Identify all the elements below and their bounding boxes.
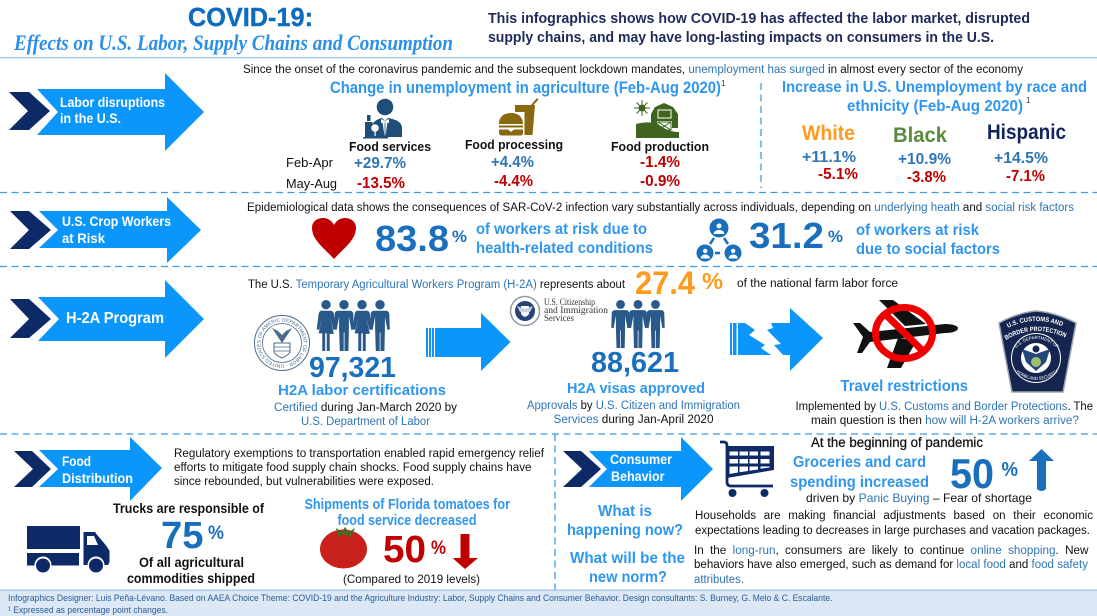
stat: trucks share: 75 xyxy=(161,515,204,557)
heading: race and ethnicity: 1 xyxy=(1026,96,1031,105)
stat: health-related: health-related conditions xyxy=(476,240,653,257)
header description: supply chains, and may have long-lasting impacts on consumers in the U.S. xyxy=(488,30,994,46)
consumer description xyxy=(694,510,1093,586)
stat: tomato decline: % xyxy=(431,538,446,559)
unemployment values: -0.9% xyxy=(640,173,680,190)
period labels: Feb-Apr xyxy=(286,155,334,170)
stat: spending increase xyxy=(950,450,1018,497)
period labels: May-Aug xyxy=(286,176,337,191)
consumer description: Households are making financial adjustments based on their economic xyxy=(695,510,1093,522)
race values: +11.1% xyxy=(802,149,856,166)
section arrow: consumer behavior: Behavior xyxy=(611,468,665,484)
footer: Infographics Designer: Luis Peña-Lévano. Based on AAEA Choice Theme: COVID-19 and the Agriculture Industry: Labor, Supply Chains and Consumer Behavior. Design consultants: S. Burney, G. Melo & C. Escalante. xyxy=(8,593,832,604)
section arrow: food distribution: Distribution xyxy=(62,470,133,486)
stat: farm labor force share: % xyxy=(702,268,723,294)
stat: health-related xyxy=(375,218,653,259)
unemployment values: +4.4% xyxy=(491,154,534,171)
section arrow: H-2A xyxy=(10,280,204,358)
race values: -7.1% xyxy=(1006,168,1045,185)
period labels xyxy=(286,155,337,191)
USCIS wordmark: and Immigration xyxy=(544,305,609,315)
title: Effects on U.S. Labor, Supply Chains and Consumption xyxy=(13,30,453,55)
travel restrictions text: main question is then how will H-2A workers arrive? xyxy=(811,415,1079,427)
icon: shopping cart xyxy=(720,442,774,497)
stat: H2A visas xyxy=(527,347,740,426)
pandemic spending text: driven by Panic Buying – Fear of shortage xyxy=(806,491,1032,505)
race values: -5.1% xyxy=(818,166,858,183)
stat: spending increase: 50 xyxy=(950,450,994,497)
stat: health-related: 83.8 xyxy=(375,218,449,259)
pandemic spending text xyxy=(790,435,1032,505)
stat: social factors: 31.2 xyxy=(749,215,824,256)
icon: heart xyxy=(312,218,356,259)
unemployment values xyxy=(354,154,680,192)
icon: social network xyxy=(696,218,742,262)
food distribution description: Regulatory exemptions to transportation enabled rapid emergency relief xyxy=(174,448,545,460)
stat: farm labor force share: 27.4 xyxy=(635,265,695,301)
consumer questions: new norm? xyxy=(589,569,667,586)
heading: change in unemployment: 1 xyxy=(721,79,726,88)
stat: H2A visas: Services during Jan-April 2020 xyxy=(554,414,714,426)
sector labels: Food processing xyxy=(465,137,563,152)
stat: H2A certifications: U.S. Department of Labor xyxy=(301,416,430,428)
section arrow: crop workers xyxy=(10,197,201,263)
consumer questions: What will be the xyxy=(570,550,685,567)
USCIS wordmark xyxy=(544,297,609,323)
heading: race and ethnicity: ethnicity (Feb-Aug 2020) xyxy=(847,98,1023,115)
arrow: certifications to visas xyxy=(426,313,510,371)
consumer description: expectations leading to decreases in large purchases and vacation packages. xyxy=(695,525,1090,537)
crop workers intro text: Epidemiological data shows the consequences of SAR-CoV-2 infection vary substantially across individuals, depending on underlying heath and social risk factors xyxy=(247,202,1074,214)
stat: social factors: due to social factors xyxy=(856,241,1000,258)
stat: H2A certifications: 97,321 xyxy=(309,352,396,384)
stat: trucks share xyxy=(113,500,264,586)
footer xyxy=(0,590,1097,616)
stat: H2A certifications: H2A labor certifications xyxy=(278,382,446,399)
USCIS wordmark: U.S. Citizenship xyxy=(544,297,595,307)
icon: truck xyxy=(27,526,110,574)
section arrow: crop workers: U.S. Crop Workers xyxy=(62,213,171,229)
travel restrictions text: Travel restrictions xyxy=(840,378,968,395)
stat: H2A certifications: Certified during Jan-March 2020 by xyxy=(274,402,457,414)
icon: DHS seal xyxy=(510,296,540,326)
consumer description: In the long-run, consumers are likely to continue online shopping. New xyxy=(694,545,1089,557)
unemployment values: -1.4% xyxy=(640,154,680,171)
stat: tomato decline xyxy=(383,529,446,571)
sector labels: Food production xyxy=(611,139,709,154)
USCIS wordmark: Services xyxy=(544,313,574,323)
heading: race and ethnicity xyxy=(782,79,1087,115)
icon: burger and drink xyxy=(498,98,538,137)
race labels: White xyxy=(802,122,855,145)
stat: H2A visas: Approvals by U.S. Citizen and Immigration xyxy=(527,400,740,412)
heading: race and ethnicity: Increase in U.S. Unemployment by race and xyxy=(782,79,1087,96)
title: COVID-19: xyxy=(188,2,313,32)
section arrow: labor disruptions: in the U.S. xyxy=(60,110,121,126)
icon: four workers xyxy=(317,300,390,352)
pandemic spending text: spending increased xyxy=(790,474,929,491)
race labels: Hispanic xyxy=(987,121,1066,144)
race labels: Black xyxy=(893,124,947,147)
consumer questions: happening now? xyxy=(567,522,683,539)
icon: barn and field xyxy=(634,100,679,138)
consumer questions: What is xyxy=(598,503,652,520)
section arrow: labor disruptions xyxy=(9,73,204,151)
icon: down arrow xyxy=(452,534,478,569)
stat: health-related: of workers at risk due to xyxy=(476,221,647,238)
section arrow: H-2A: H-2A Program xyxy=(66,310,164,327)
H-2A intro text: of the national farm labor force xyxy=(737,278,898,290)
icon: customs and border protection badge: BORDER PROTECTION xyxy=(1004,326,1067,340)
travel restrictions text xyxy=(796,378,1093,427)
title xyxy=(13,2,453,55)
tomato heading xyxy=(304,496,510,529)
stat: health-related: % xyxy=(452,227,467,246)
food distribution description xyxy=(174,448,545,488)
consumer description: attributes. xyxy=(694,574,744,586)
food distribution description: since rebounded, but vulnerabilities were exposed. xyxy=(174,476,434,488)
section arrow: consumer behavior: Consumer xyxy=(610,451,672,467)
stat: social factors: % xyxy=(828,227,843,246)
food distribution description: efforts to mitigate food supply chain shocks. Food supply chains have xyxy=(174,462,532,474)
icon: up arrow xyxy=(1029,449,1054,491)
icon: broken arrow xyxy=(730,308,823,371)
icon: plane with prohibition sign xyxy=(853,300,958,368)
comparison note: (Compared to 2019 levels) xyxy=(343,572,480,586)
stat: H2A visas: H2A visas approved xyxy=(567,380,705,397)
sector labels xyxy=(349,137,709,154)
stat: H2A visas: 88,621 xyxy=(591,347,679,379)
icon: customs and border protection badge: HOMELAND SECURITY xyxy=(1016,369,1058,380)
H-2A intro text xyxy=(248,278,898,291)
tomato heading: food service decreased xyxy=(338,512,476,529)
consumer questions xyxy=(567,503,685,586)
footer: ¹ Expressed as percentage point changes. xyxy=(8,605,168,616)
stat: social factors: of workers at risk xyxy=(856,222,979,239)
section arrow: crop workers: at Risk xyxy=(62,230,105,246)
travel restrictions text: Implemented by U.S. Customs and Border Protections. The xyxy=(796,401,1093,413)
race values xyxy=(802,149,1048,186)
icon: customs and border protection badge: U.S. CUSTOMS AND xyxy=(1006,316,1063,328)
unemployment values: -13.5% xyxy=(357,175,405,192)
icon: three workers xyxy=(611,300,665,348)
stat: social factors xyxy=(749,215,1000,258)
stat: tomato decline: 50 xyxy=(383,529,426,571)
race labels xyxy=(802,121,1066,147)
pandemic spending text: At the beginning of pandemic xyxy=(811,435,983,450)
heading: change in unemployment: Change in unemployment in agriculture (Feb-Aug 2020) xyxy=(330,79,721,97)
icon: Department of Labor seal xyxy=(254,315,310,371)
stat: trucks share: commodities shipped xyxy=(127,570,255,586)
header description xyxy=(488,11,1030,46)
unemployment values: +29.7% xyxy=(354,155,406,172)
section arrow: food distribution: Food xyxy=(62,453,91,469)
race values: -3.8% xyxy=(907,169,946,186)
stat: trucks share: % xyxy=(208,523,224,544)
icon: waiter xyxy=(363,99,402,138)
icon: tomato xyxy=(320,527,367,568)
race values: +14.5% xyxy=(994,150,1048,167)
icon: customs and border protection badge xyxy=(998,310,1077,393)
header description: This infographics shows how COVID-19 has affected the labor market, disrupted xyxy=(488,11,1030,27)
stat: trucks share: Trucks are responsible of xyxy=(113,500,264,516)
tomato heading: Shipments of Florida tomatoes for xyxy=(304,496,510,513)
stat: spending increase: % xyxy=(1002,459,1018,481)
section arrow: labor disruptions: Labor disruptions xyxy=(60,94,165,110)
unemployment values: -4.4% xyxy=(494,173,533,190)
section arrow: consumer behavior xyxy=(563,437,713,501)
pandemic spending text: Groceries and card xyxy=(793,454,926,471)
sector labels: Food services xyxy=(349,139,431,154)
stat: H2A certifications xyxy=(274,352,457,428)
icon: customs and border protection badge: U.S. DEPARTMENT OF xyxy=(1014,336,1059,348)
stat: trucks share: Of all agricultural xyxy=(139,554,244,570)
race values: +10.9% xyxy=(898,151,951,168)
H-2A intro text: The U.S. Temporary Agricultural Workers Program (H-2A) represents about xyxy=(248,279,626,291)
section arrow: food distribution xyxy=(14,437,162,501)
consumer description: behaviors have also emerged, such as demand for local food and food safety xyxy=(694,559,1088,571)
labor intro text: Since the onset of the coronavirus pandemic and the subsequent lockdown mandates, unemployment has surged in almost every sector of the economy xyxy=(243,64,1023,76)
icon: Department of Labor seal: DEPARTMENT OF LABOR · UNITED STATES OF AMERICA xyxy=(257,318,307,368)
